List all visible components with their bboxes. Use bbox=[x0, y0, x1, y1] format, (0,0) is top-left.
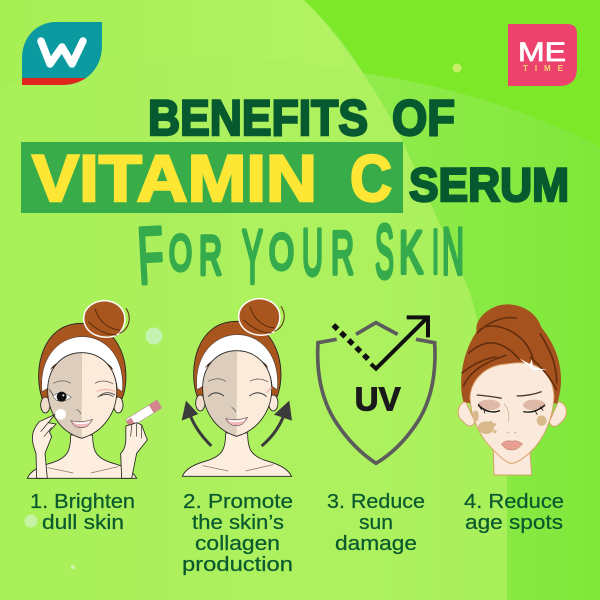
label: reduce sun damage: 3. Reduce bbox=[327, 490, 425, 513]
illustration: woman with age spots bbox=[458, 304, 566, 475]
label: reduce age spots: age spots bbox=[465, 511, 563, 534]
infographic canvas: N bbox=[442, 214, 464, 288]
logo: Watsons bbox=[22, 22, 102, 85]
label: promote collagen: the skin’s bbox=[192, 511, 284, 534]
label: reduce sun damage: damage bbox=[335, 532, 417, 555]
heading: For your skin: K bbox=[399, 219, 423, 286]
heading box: Vitamin C: VITAMIN bbox=[32, 141, 317, 215]
label: reduce age spots bbox=[464, 490, 564, 534]
heading: For your skin: S bbox=[375, 210, 394, 295]
heading: Benefits of: OF bbox=[392, 90, 455, 146]
heading: For your skin: F bbox=[135, 210, 166, 301]
heading: Benefits of: BENEFITS bbox=[148, 90, 368, 146]
label: brighten dull skin bbox=[30, 490, 135, 534]
icon: UV shield bbox=[318, 317, 435, 463]
right arrow bbox=[262, 401, 292, 446]
heading box: Vitamin C: C bbox=[350, 141, 392, 215]
label: reduce sun damage bbox=[327, 490, 425, 555]
label: reduce age spots: 4. Reduce bbox=[464, 490, 564, 513]
label: promote collagen: production bbox=[182, 553, 293, 576]
logo: ME TIME: TIME bbox=[523, 64, 564, 73]
illustration: smiling woman with lift arrows bbox=[182, 299, 292, 476]
heading: For your skin: R bbox=[199, 224, 222, 286]
logo: ME TIME: ME bbox=[518, 37, 566, 67]
illustration: woman applying serum bbox=[27, 301, 162, 478]
label: brighten dull skin: dull skin bbox=[42, 511, 124, 534]
heading: Serum: SERUM bbox=[409, 158, 569, 211]
logo: ME TIME bbox=[508, 24, 577, 86]
label: reduce sun damage: sun bbox=[359, 511, 393, 534]
label: promote collagen: collagen bbox=[195, 532, 280, 555]
heading box: Vitamin C bbox=[21, 141, 403, 215]
heading: For your skin: O bbox=[269, 224, 294, 280]
label: promote collagen bbox=[182, 490, 293, 576]
heading: For your skin: I bbox=[432, 218, 439, 287]
label: brighten dull skin: 1. Brighten bbox=[30, 490, 135, 513]
icon: UV shield: UV bbox=[355, 382, 401, 419]
heading: For your skin: O bbox=[169, 225, 192, 281]
heading: For your skin: Y bbox=[242, 215, 263, 300]
heading: For your skin: U bbox=[302, 215, 323, 289]
left arrow bbox=[182, 401, 211, 446]
heading: For your skin: R bbox=[331, 220, 354, 287]
heading: For your skin bbox=[135, 210, 464, 301]
label: promote collagen: 2. Promote bbox=[183, 490, 293, 513]
